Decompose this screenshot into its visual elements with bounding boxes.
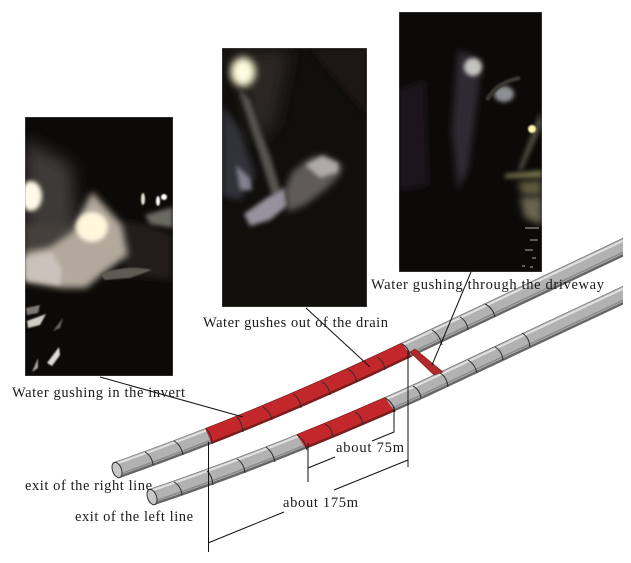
tunnel: left line	[152, 286, 630, 502]
photo: water gushing in the invert	[20, 117, 173, 376]
photo: water gushing through the driveway	[399, 12, 542, 272]
label: water gushing through the driveway: Water gushing through the driveway	[371, 277, 605, 293]
dimension: about 175m: about 175m	[283, 495, 359, 511]
red section: right line	[205, 342, 412, 444]
dimension: about 175m	[208, 350, 408, 552]
label: exit of the left line: exit of the left line	[75, 509, 193, 525]
tunnel rings and end caps	[110, 304, 530, 506]
red section: left line	[296, 397, 394, 449]
red driveway connection	[410, 349, 443, 375]
dimension: about 75m: about 75m	[336, 440, 405, 456]
callout leader lines	[100, 272, 471, 417]
label: exit of the right line: exit of the right line	[25, 478, 152, 494]
dimension: about 75m	[308, 407, 405, 482]
label: water gushing in the invert: Water gushing in the invert	[12, 385, 185, 401]
label: water gushes out of the drain: Water gushes out of the drain	[203, 315, 389, 331]
tunnel: right line	[117, 238, 630, 475]
photo: water gushes out of the drain	[222, 48, 367, 307]
